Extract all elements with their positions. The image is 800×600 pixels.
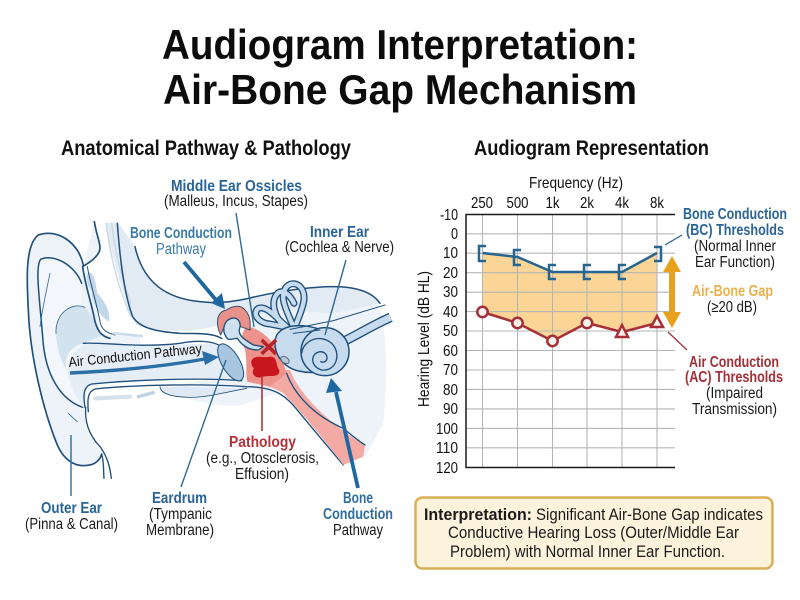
pathology blob — [251, 357, 279, 377]
frequency tick labels: 8k — [650, 195, 665, 212]
ossicles — [224, 318, 263, 350]
title: Air-Bone Gap Mechanism — [163, 66, 637, 113]
label: bone conduction pathway lower — [323, 490, 393, 539]
label: bone conduction thresholds: Ear Function) — [695, 254, 775, 271]
callout: interpretation: Problem) with Normal Inner Ear Function. — [450, 542, 725, 561]
frequency tick labels — [471, 195, 665, 212]
label: eardrum — [146, 490, 214, 539]
label: eardrum: (Tympanic — [149, 506, 212, 523]
label: bone conduction pathway upper: Pathway — [156, 241, 206, 258]
label: bone conduction pathway upper — [130, 225, 232, 258]
air conduction line and markers — [477, 307, 663, 346]
leader: air conduction thresholds — [668, 332, 687, 350]
frequency tick labels: 1k — [546, 195, 560, 212]
arrow: bone conduction upper — [184, 262, 225, 309]
label: inner ear: Inner Ear — [310, 224, 369, 241]
label: bone conduction thresholds — [683, 206, 787, 271]
hearing level tick labels: 20 — [443, 265, 458, 282]
frequency tick labels: 4k — [615, 195, 630, 212]
title: Audiogram Interpretation: — [162, 21, 638, 68]
label: outer ear — [25, 500, 118, 533]
inner ear: semicircular canals and cochlea — [256, 284, 391, 376]
bone conduction line and markers — [479, 246, 661, 279]
bone band — [105, 223, 380, 331]
label: air conduction thresholds: (Impaired — [706, 385, 763, 402]
head tissue background — [160, 286, 386, 457]
hearing level tick labels: 100 — [436, 421, 458, 438]
red X — [262, 340, 276, 354]
label: outer ear: (Pinna & Canal) — [25, 516, 118, 533]
hearing level tick labels: -10 — [440, 207, 458, 224]
hearing level tick labels: 0 — [451, 226, 458, 243]
label: bone conduction pathway upper: Bone Conduction — [130, 225, 232, 242]
label: bone conduction pathway lower: Pathway — [333, 522, 383, 539]
hearing level tick labels: 30 — [443, 284, 458, 301]
label: pathology: (e.g., Otosclerosis, — [206, 450, 319, 467]
label: bone conduction pathway lower: Bone — [343, 490, 373, 507]
label: pathology: Effusion) — [235, 466, 289, 483]
arrow: air conduction pathway — [70, 351, 219, 373]
label: bone conduction pathway lower: Conduction — [323, 506, 393, 523]
axis title: frequency: Frequency (Hz) — [529, 175, 623, 192]
callout: interpretation — [416, 498, 772, 568]
frequency tick labels: 2k — [580, 195, 595, 212]
label: inner ear: (Cochlea & Nerve) — [285, 239, 394, 256]
hearing level tick labels: 40 — [443, 304, 458, 321]
label: air-bone gap: Air-Bone Gap — [692, 283, 773, 300]
label: middle ear ossicles: Middle Ear Ossicles — [171, 178, 302, 195]
hearing level tick labels: 90 — [443, 401, 458, 418]
skull top lines — [106, 223, 380, 338]
ear canal — [67, 333, 343, 465]
arrow: air-bone gap — [663, 256, 681, 328]
axis title: hearing level: Hearing Level (dB HL) — [416, 271, 433, 407]
label: eardrum: Eardrum — [152, 490, 207, 507]
arrow: bone conduction lower — [326, 378, 358, 488]
hearing level tick labels: 110 — [436, 440, 458, 457]
label: air conduction thresholds: Transmission) — [692, 401, 777, 418]
label: air-bone gap — [692, 283, 773, 316]
frequency tick labels: 250 — [471, 195, 493, 212]
audiogram chart — [466, 214, 675, 468]
air-bone gap shading — [482, 253, 657, 341]
label: outer ear: Outer Ear — [41, 500, 102, 517]
hearing level tick labels: 70 — [443, 362, 458, 379]
hearing level tick labels — [436, 207, 458, 477]
label: eardrum: Membrane) — [146, 522, 214, 539]
label: air-bone gap: (≥20 dB) — [707, 299, 757, 316]
label: pathology: Pathology — [229, 434, 296, 451]
hearing level tick labels: 60 — [443, 343, 458, 360]
callout: interpretation: Conductive Hearing Loss (Outer/Middle Ear — [448, 523, 739, 542]
hearing level tick labels: 120 — [436, 460, 458, 477]
frequency tick labels: 500 — [506, 195, 529, 212]
title — [162, 21, 638, 113]
callout: interpretation: Interpretation: — [424, 505, 532, 524]
label: inner ear — [285, 224, 394, 256]
label: air conduction pathway: Air Conduction Pathway — [68, 340, 203, 370]
grid lines — [466, 214, 675, 467]
callout: interpretation: Significant Air-Bone Gap indicates — [536, 505, 763, 524]
hearing level tick labels: 50 — [443, 323, 458, 340]
label: middle ear ossicles: (Malleus, Incus, Stapes) — [164, 193, 308, 210]
leader lines for ear labels — [71, 213, 346, 496]
label: air conduction thresholds — [685, 354, 783, 418]
ear anatomy illustration — [27, 222, 391, 478]
label: middle ear ossicles — [164, 178, 308, 210]
label: pathology — [206, 434, 319, 483]
eardrum — [213, 340, 249, 385]
pinna — [27, 222, 140, 478]
heading: audiogram representation: Audiogram Representation — [474, 137, 709, 160]
hearing level tick labels: 10 — [443, 245, 458, 262]
axes — [466, 214, 675, 468]
middle ear cavity (pink) — [217, 306, 365, 465]
label: bone conduction thresholds: (Normal Inner — [694, 238, 776, 255]
hearing level tick labels: 80 — [443, 382, 458, 399]
leader: bone conduction thresholds — [665, 235, 682, 245]
heading: anatomical pathway: Anatomical Pathway & Pathology — [61, 137, 351, 160]
